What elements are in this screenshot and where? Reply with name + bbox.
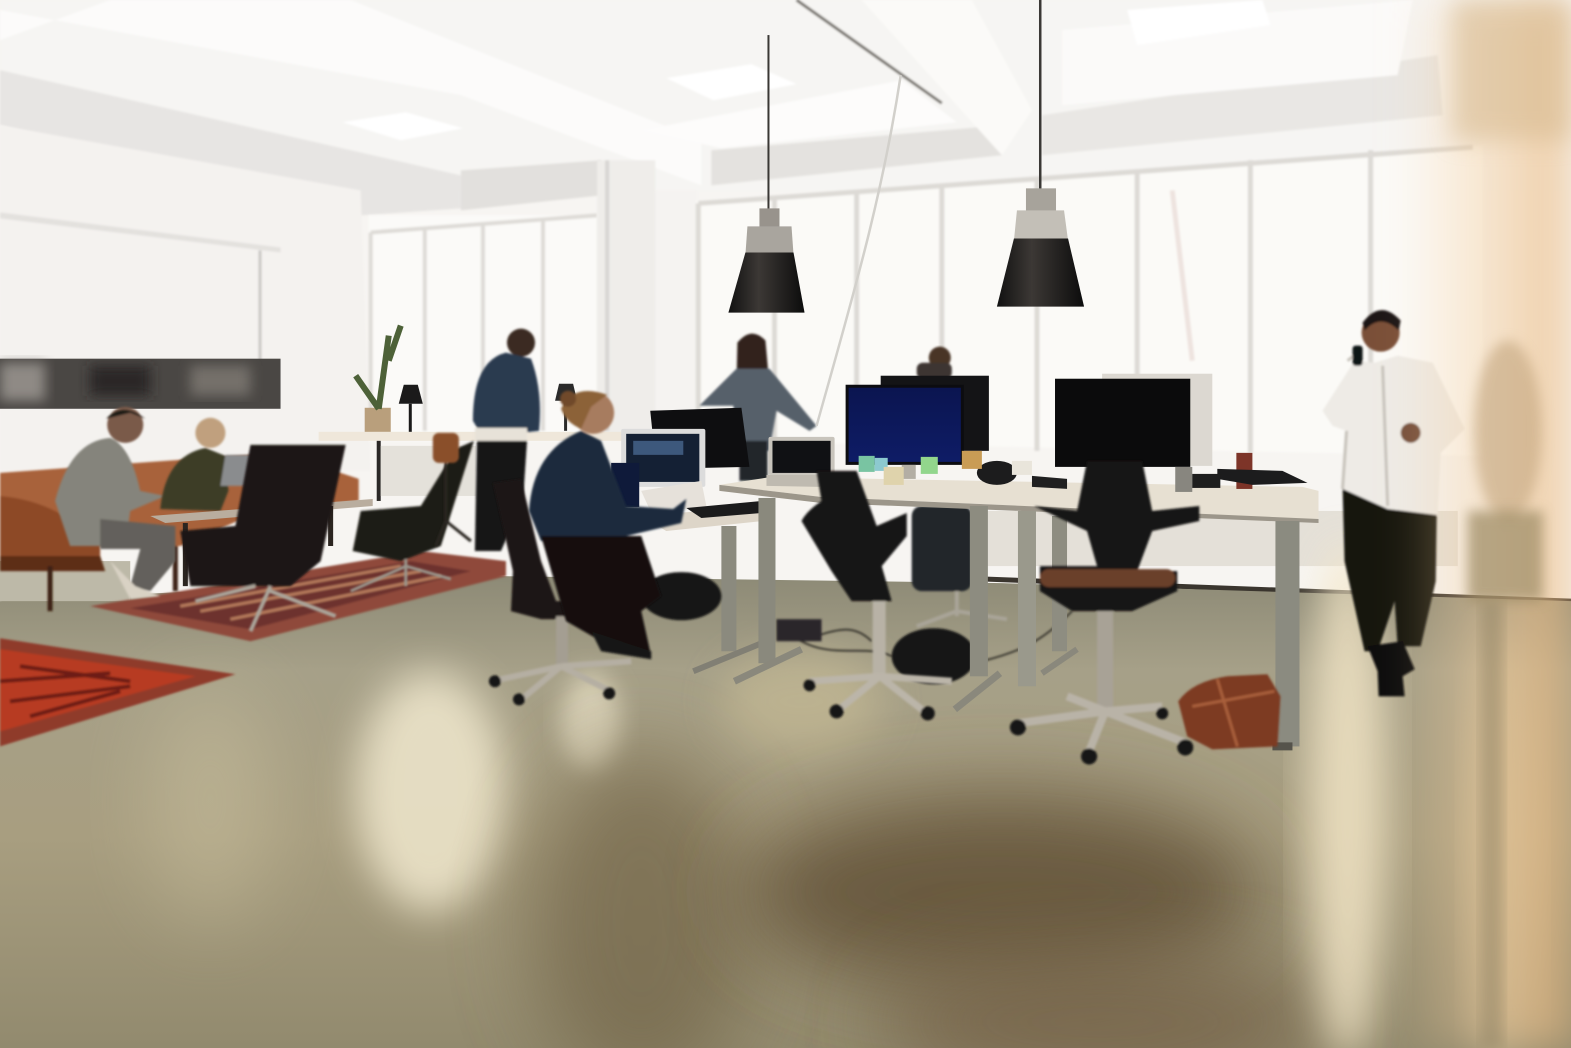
bags and cables under desks xyxy=(641,572,1072,684)
sofa xyxy=(0,453,359,611)
back desk monitors xyxy=(650,374,1212,469)
hanging cable xyxy=(817,75,901,426)
ceiling with light panels and beams xyxy=(0,0,1571,215)
laptop and monitor at sitting person's desk xyxy=(611,429,706,513)
person standing in denim jacket xyxy=(473,329,540,551)
person on sofa, blonde xyxy=(160,418,265,511)
windows: main bank xyxy=(696,145,1483,456)
rug: front left xyxy=(0,638,235,746)
red stool behind denim person xyxy=(433,433,471,546)
floor xyxy=(0,541,1571,1048)
blurred person and haze in the foreground right xyxy=(1403,0,1571,1048)
office chair: saddle front xyxy=(1010,461,1199,764)
central standing desk xyxy=(719,477,1319,746)
monitor: black screen xyxy=(1055,379,1192,492)
person hidden behind monitors xyxy=(917,347,952,379)
column xyxy=(597,160,697,441)
left wall xyxy=(0,125,371,471)
laptop on central desk xyxy=(766,437,836,487)
pendant lamp: left xyxy=(728,35,805,313)
rug: lounge xyxy=(90,551,506,641)
seated man in navy shirt xyxy=(529,391,686,659)
radiator under windows xyxy=(381,446,1571,601)
desk clutter: notes, mugs, headphones, pen holder, phones xyxy=(859,451,1307,489)
leather bag xyxy=(1178,674,1280,749)
seated man's office chair xyxy=(489,479,631,705)
back chair under central desk xyxy=(912,506,1007,626)
lounge armchair: large xyxy=(180,445,346,631)
woman standing at back xyxy=(699,334,817,481)
left desk xyxy=(641,501,763,671)
lounge armchair: small xyxy=(351,441,474,591)
lounge table xyxy=(150,499,373,586)
painting on wall xyxy=(0,359,281,409)
person on sofa with grey hoodie xyxy=(55,407,175,599)
woman on phone xyxy=(1323,310,1465,696)
office chair: centre xyxy=(802,471,952,720)
monitor: blue screen xyxy=(846,385,964,479)
pendant lamp: right xyxy=(997,0,1084,307)
back counter with plant and lamps xyxy=(319,326,629,501)
windows: back left xyxy=(369,215,597,441)
